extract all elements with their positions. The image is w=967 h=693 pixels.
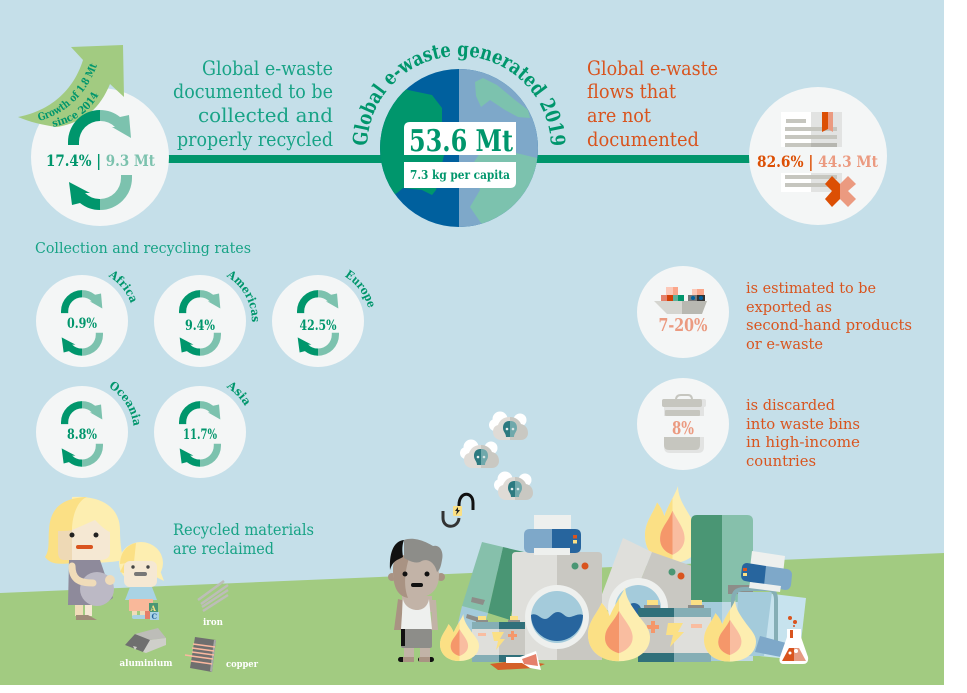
region: Americas: Americas bbox=[226, 271, 258, 322]
heading: collection rates: Collection and recycling rates bbox=[35, 239, 251, 257]
label: aluminium: aluminium bbox=[120, 658, 172, 669]
illustration: tall fridge bbox=[691, 515, 753, 661]
illustration: big back flame bbox=[645, 486, 700, 563]
text: recycled materials: Recycled materials bbox=[173, 520, 314, 539]
label: copper: copper bbox=[226, 659, 259, 670]
curved heading: Global e-waste generated 2019 bbox=[352, 45, 566, 145]
illustration: tilted fridge bbox=[456, 542, 524, 640]
illustration: washing machine bbox=[512, 552, 602, 660]
illustration: tilted printer bbox=[741, 551, 792, 592]
illustration: chemical flask bbox=[780, 616, 808, 664]
text: discarded bbox=[746, 396, 860, 470]
total figure box: 53.6 Mt bbox=[409, 124, 513, 159]
icon: copper coil bbox=[185, 637, 216, 672]
icon: toxic cloud 1 bbox=[489, 412, 528, 440]
text: documented flows: Global e-waste bbox=[202, 56, 333, 80]
panel: globe bbox=[380, 69, 538, 227]
growth arrow bbox=[18, 45, 124, 127]
region: Europe: Europe bbox=[344, 270, 374, 308]
text: recycled materials: are reclaimed bbox=[173, 539, 274, 558]
illustration: man bbox=[388, 539, 445, 662]
panel: exported circle bbox=[637, 266, 729, 358]
region: Asia: 11.7% bbox=[183, 427, 217, 443]
text: discarded: countries bbox=[746, 452, 816, 470]
text: undocumented flows: are not bbox=[587, 103, 651, 127]
region: Africa: Africa bbox=[108, 271, 136, 304]
text: undocumented flows bbox=[587, 56, 718, 151]
region: Americas bbox=[154, 271, 258, 367]
illustration: light panel bbox=[733, 589, 806, 660]
illustration: flame left bbox=[440, 614, 479, 661]
text: documented flows: collected and bbox=[198, 103, 333, 127]
region: Africa: 0.9% bbox=[67, 316, 97, 332]
illustration: tilted machine bbox=[598, 538, 692, 638]
illustration: battery right bbox=[638, 600, 711, 662]
illustration: mother bbox=[45, 497, 123, 620]
text: discarded: is discarded bbox=[746, 396, 835, 414]
region: Oceania: 8.8% bbox=[67, 427, 97, 443]
illustration: broken tool bbox=[490, 651, 545, 670]
icon: cargo ship bbox=[654, 287, 707, 314]
figure: 8%: 8% bbox=[672, 418, 694, 439]
text: exported: or e-waste bbox=[746, 335, 823, 353]
green hill bbox=[0, 553, 944, 685]
figure: 7-20%: 7-20% bbox=[658, 315, 708, 336]
region: Asia bbox=[154, 382, 249, 478]
region: Asia: Asia bbox=[226, 382, 249, 406]
growth label first line: Growth of 1.8 Mt bbox=[38, 64, 97, 120]
figure: 17.4% and 9.3 Mt: 17.4% | 9.3 Mt bbox=[46, 151, 156, 170]
illustration: child with blocks bbox=[119, 542, 164, 621]
label: iron: iron bbox=[203, 617, 223, 628]
text: discarded: in high-income bbox=[746, 433, 860, 451]
region: Americas: 9.4% bbox=[185, 318, 215, 334]
text: undocumented flows: Global e-waste bbox=[587, 56, 718, 80]
region: Oceania: Oceania bbox=[110, 382, 140, 426]
text: exported: exported as bbox=[746, 298, 832, 316]
icon: document with bookmark bbox=[781, 112, 842, 147]
figure: 82.6% and 44.3 Mt: 82.6% | 44.3 Mt bbox=[757, 152, 879, 171]
text: undocumented flows: flows that bbox=[587, 79, 676, 103]
text: undocumented flows: documented bbox=[587, 127, 699, 151]
region: Africa bbox=[36, 271, 136, 367]
panel: documented e-waste circle bbox=[18, 45, 169, 226]
text: exported: is estimated to be bbox=[746, 279, 876, 297]
icon: toxic cloud 2 bbox=[460, 440, 499, 468]
icon: aluminium ingots bbox=[125, 628, 166, 653]
toy blocks: A bbox=[150, 604, 156, 613]
icon: waste bin bbox=[662, 395, 706, 453]
text: documented flows bbox=[173, 56, 333, 151]
globe land masses bbox=[380, 78, 538, 224]
panel: waste bin circle bbox=[637, 378, 729, 470]
illustration: flame centre bbox=[588, 587, 650, 661]
text: recycled materials bbox=[173, 520, 314, 558]
icon: crossed out document bbox=[781, 173, 856, 207]
region: Europe bbox=[272, 270, 374, 367]
region: Oceania bbox=[36, 382, 140, 478]
icon: iron bars bbox=[198, 581, 228, 611]
toy blocks bbox=[145, 603, 159, 621]
illustration: printer bbox=[524, 515, 581, 555]
icon: cable bbox=[443, 494, 473, 526]
text: documented flows: documented to be bbox=[173, 79, 333, 103]
growth label second line: since 2014 bbox=[52, 92, 98, 127]
text: discarded: into waste bins bbox=[746, 415, 860, 433]
text: exported bbox=[746, 279, 912, 353]
per capita box bbox=[404, 162, 516, 188]
panel: undocumented circle bbox=[749, 87, 887, 225]
text: documented flows: properly recycled bbox=[177, 127, 333, 151]
toy blocks: C bbox=[152, 612, 158, 621]
illustration: battery left bbox=[472, 616, 525, 662]
per capita box: 7.3 kg per capita bbox=[410, 167, 510, 182]
icon: toxic cloud 3 bbox=[494, 472, 533, 500]
icon: recycling arrows bbox=[68, 110, 132, 210]
horizontal connecting line bbox=[165, 155, 755, 163]
illustration: flame right bbox=[704, 600, 756, 662]
text: exported: second-hand products bbox=[746, 316, 912, 334]
region: Europe: 42.5% bbox=[300, 318, 336, 334]
